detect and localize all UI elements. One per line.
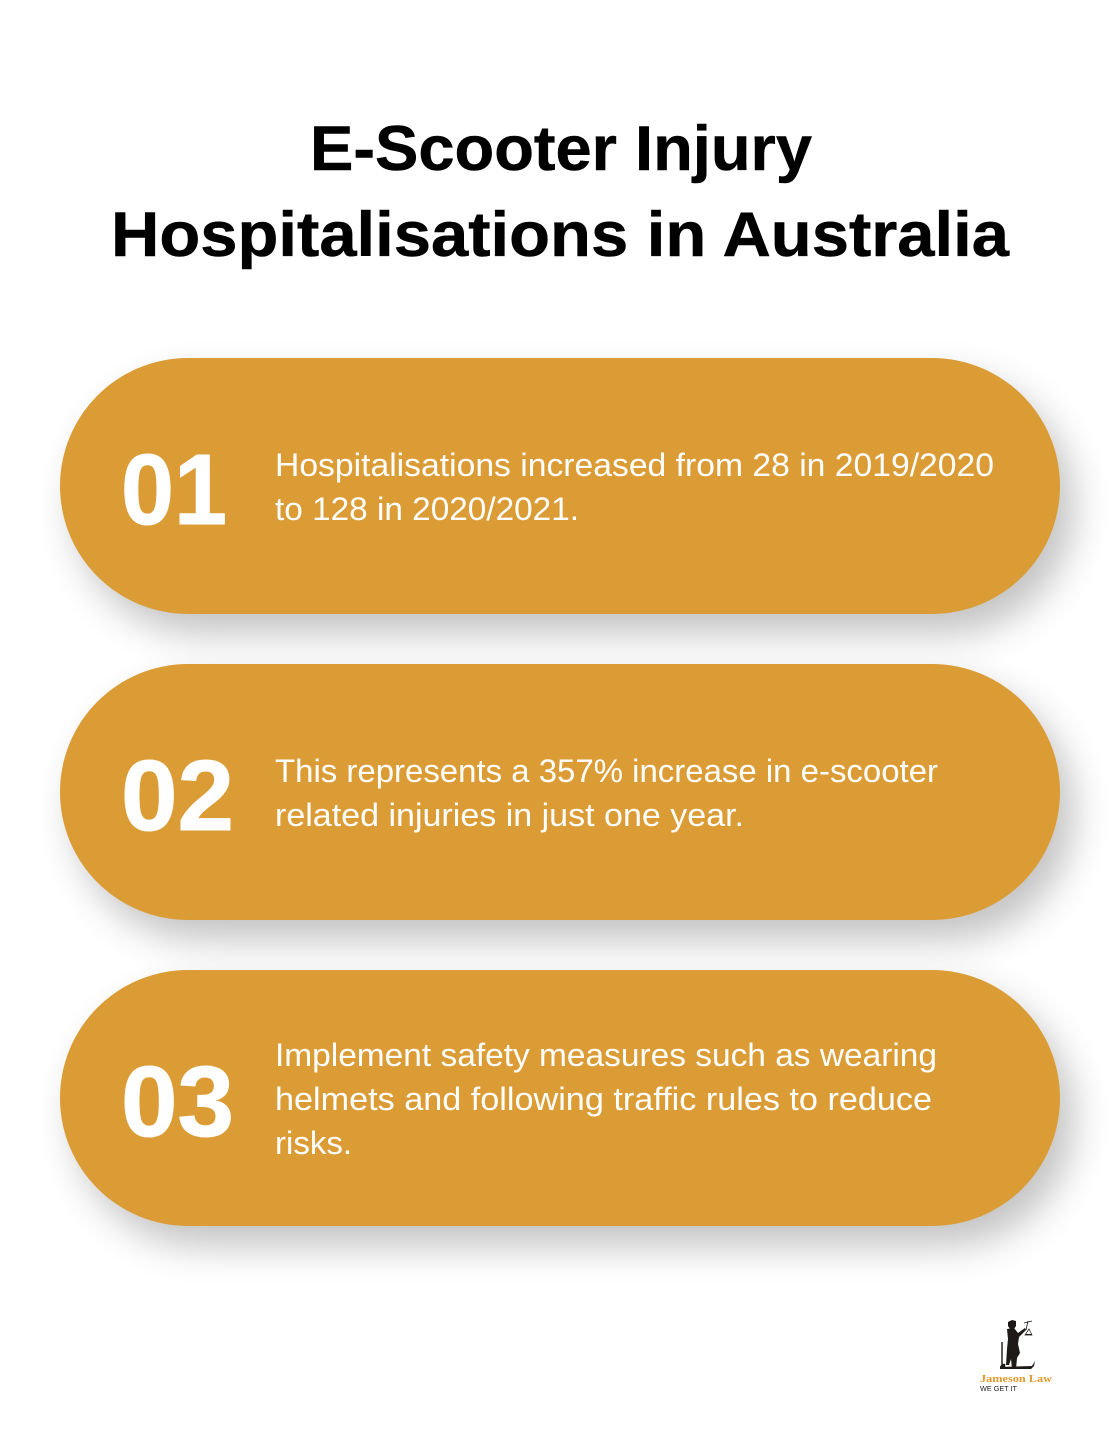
text: step 02 (275, 753, 938, 833)
title (111, 114, 1010, 270)
text: step 03: risks. (275, 1125, 352, 1161)
title: E-Scooter Injury (310, 114, 812, 184)
text: step 01 (275, 447, 994, 527)
number 02: 02 (121, 740, 234, 852)
text: step 03: Implement safety measures such as wearing (275, 1037, 937, 1073)
text: step 01: to 128 in 2020/2021. (275, 491, 579, 527)
icon: lady justice figure (1000, 1320, 1035, 1369)
text: step 02: related injuries in just one year. (275, 797, 744, 833)
text: step 02: This represents a 357% increase in e-scooter (275, 753, 938, 789)
logo tagline: WE GET IT (980, 1386, 1018, 1393)
number 01: 01 (121, 434, 227, 546)
logo name: Jameson Law (980, 1374, 1052, 1385)
panel: step 03 (60, 970, 1060, 1226)
panel: step 01 (60, 358, 1060, 614)
number 03: 03 (121, 1046, 234, 1158)
text: step 03: helmets and following traffic rules to reduce (275, 1081, 932, 1117)
logo: Jameson Law (980, 1320, 1052, 1393)
text: step 01: Hospitalisations increased from 28 in 2019/2020 (275, 447, 994, 483)
title: Hospitalisations in Australia (111, 200, 1010, 270)
panel: step 02 (60, 664, 1060, 920)
text: step 03 (275, 1037, 937, 1161)
